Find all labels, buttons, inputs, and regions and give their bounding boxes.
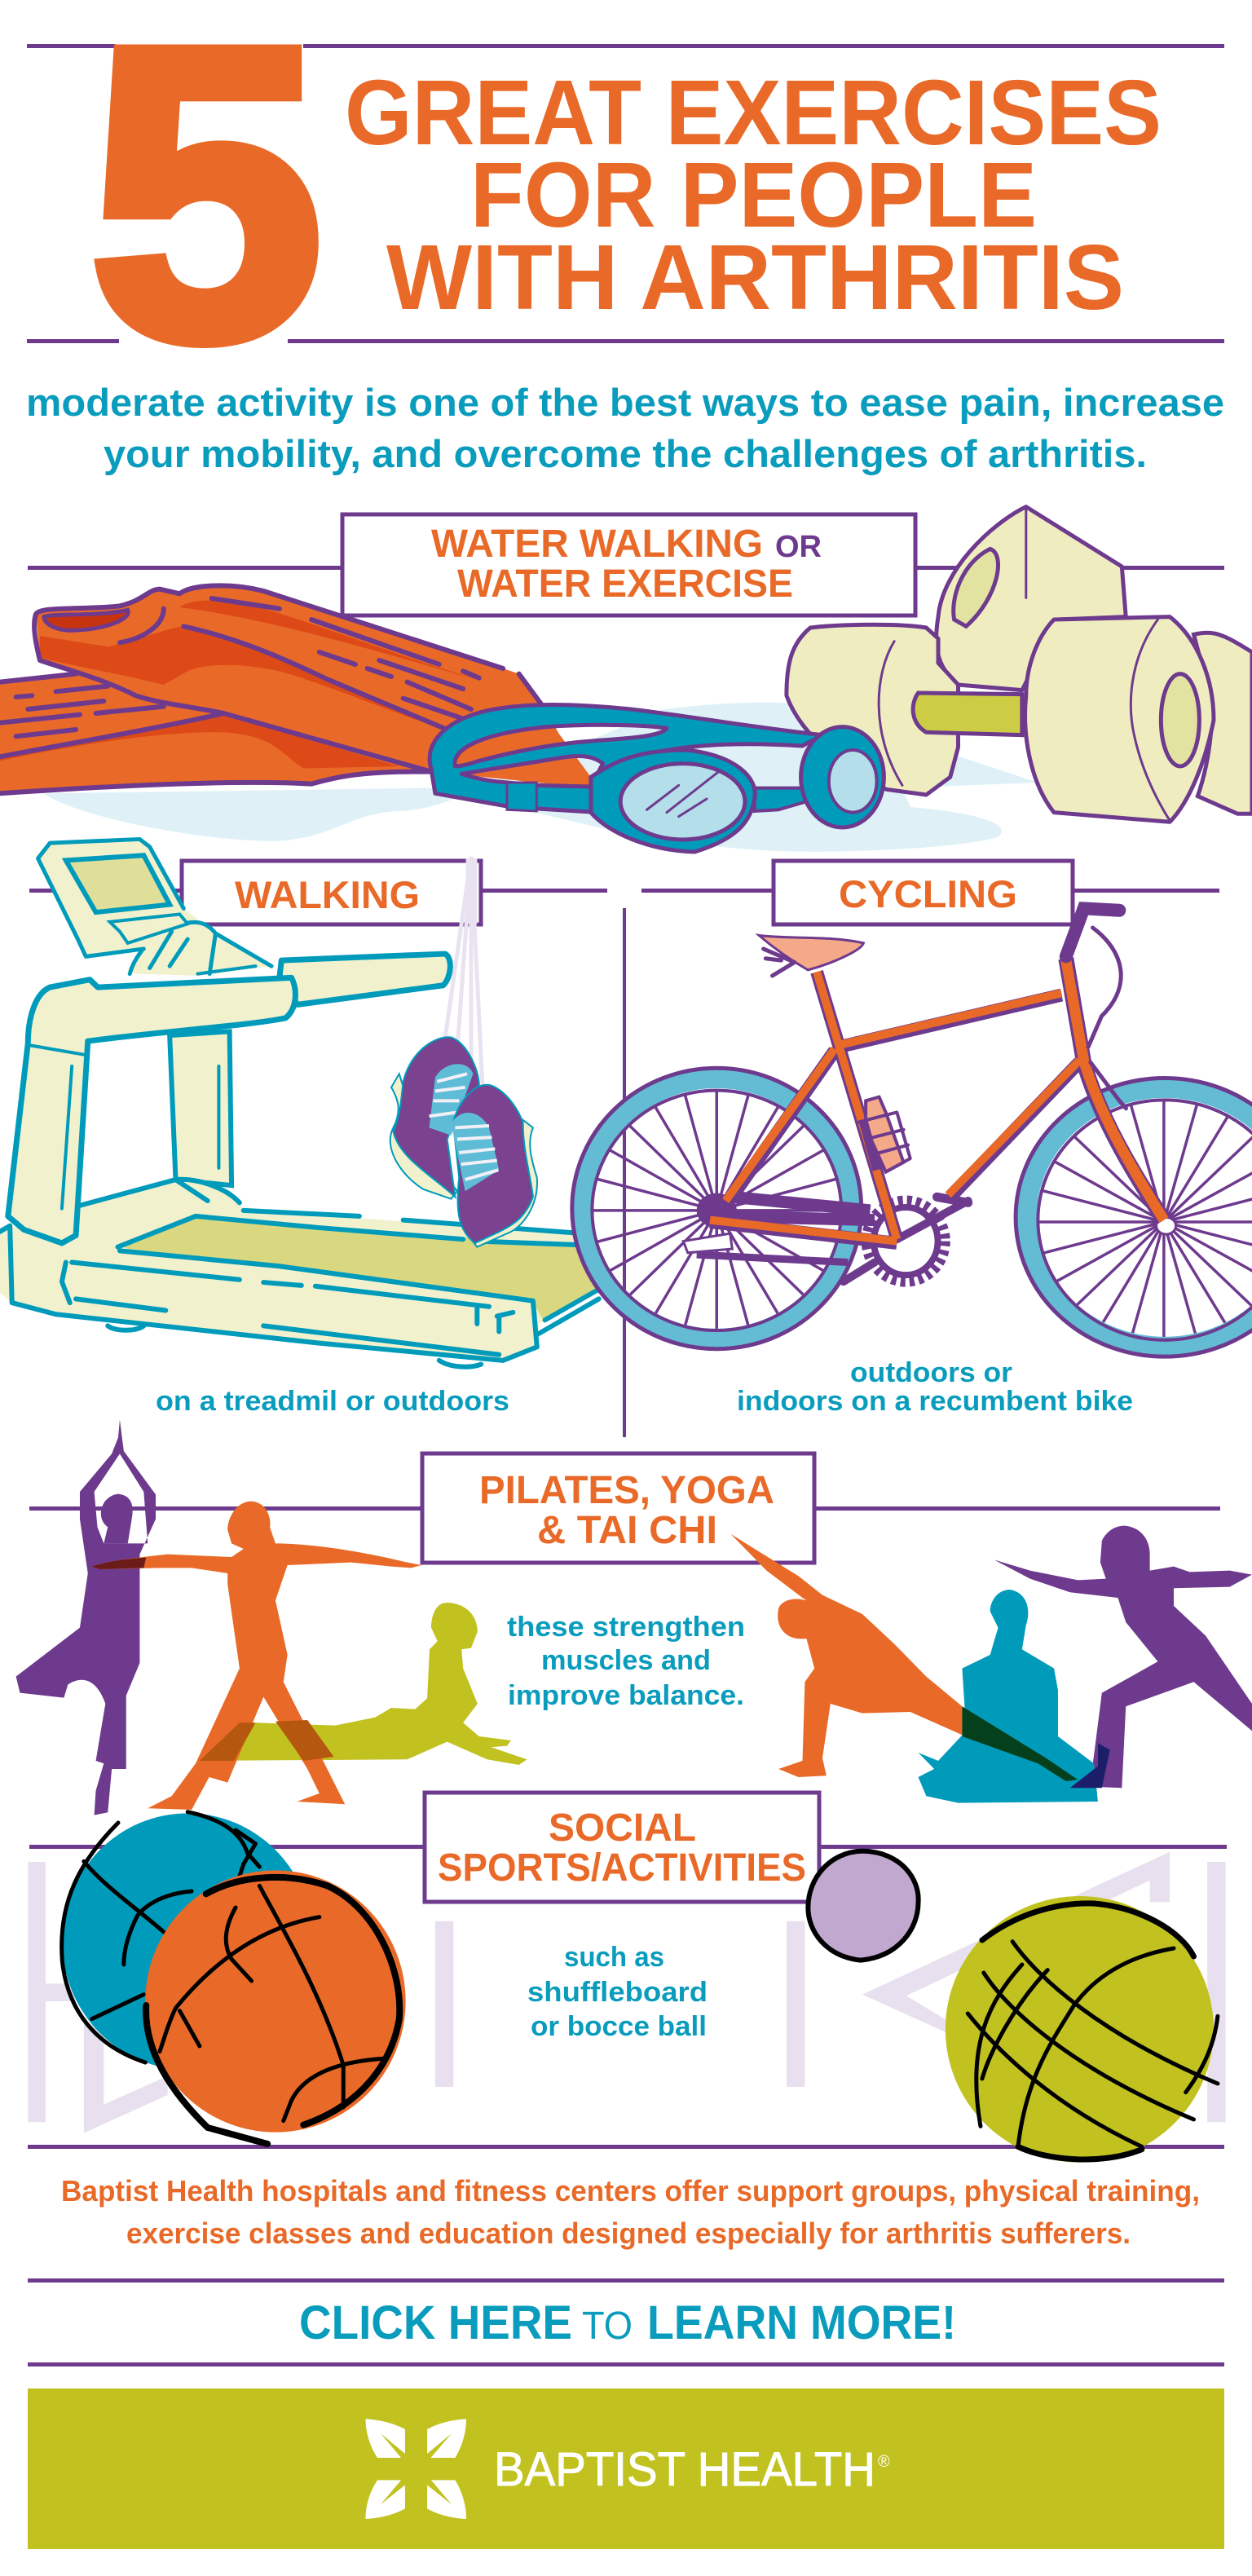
intro text: your mobility, and overcome the challenges of arthritis. [104, 432, 1147, 475]
yoga caption: muscles and [541, 1645, 711, 1676]
swim goggles [430, 705, 884, 852]
closing statement: Baptist Health hospitals and fitness centers offer support groups, physical training, [61, 2174, 1200, 2208]
icon: baptist health leaves [365, 2419, 466, 2519]
yoga caption [507, 1612, 745, 1711]
treadmill base [0, 1180, 599, 1367]
heading box: social sports: SPORTS/ACTIVITIES [438, 1846, 806, 1890]
call to action: LEARN MORE! [647, 2296, 956, 2349]
sports caption: shuffleboard [527, 1977, 708, 2008]
heading box: pilates [422, 1453, 814, 1563]
bike saddle [759, 935, 863, 976]
swim fin: front [34, 585, 591, 788]
footer bar [28, 2389, 1224, 2549]
sports caption [527, 1942, 708, 2042]
call to action [299, 2296, 956, 2349]
treadmill main frame [8, 966, 295, 1243]
left shoe [390, 1037, 479, 1199]
heading box: walking [182, 861, 481, 924]
water bottle [859, 1097, 910, 1172]
heading box: water walking: WATER EXERCISE [457, 562, 793, 606]
background court markings [28, 1852, 1226, 2133]
teal ball [62, 1812, 313, 2070]
orange ball [145, 1870, 406, 2144]
heading box: walking: WALKING [235, 873, 420, 916]
yoga caption: improve balance. [508, 1680, 744, 1711]
call to action: TO [582, 2305, 633, 2348]
treadmill far handle [280, 954, 450, 1004]
heading box: water walking: WATER WALKING [431, 523, 763, 566]
heading box: social sports: SOCIAL [549, 1806, 696, 1850]
sports caption: such as [564, 1942, 664, 1973]
heading box: cycling [774, 861, 1073, 924]
intro text: moderate activity is one of the best ways to ease pain, increase [26, 381, 1224, 424]
cycling caption [737, 1357, 1133, 1417]
heading box: pilates: PILATES, YOGA [479, 1469, 774, 1512]
handlebar and brake cable [1066, 908, 1126, 1109]
cycling caption: indoors on a recumbent bike [737, 1386, 1133, 1417]
heading box: water walking [342, 514, 915, 615]
intro text [26, 381, 1224, 475]
right shoe [451, 1085, 537, 1247]
figure: purple warrior pose right [994, 1526, 1252, 1788]
heading box: pilates: & TAI CHI [537, 1509, 717, 1552]
illustration: hanging shoes [390, 857, 537, 1247]
figure: teal seated pose [919, 1590, 1098, 1803]
lavender ball [806, 1851, 919, 1961]
closing statement [61, 2174, 1200, 2250]
rear wheel [572, 1068, 862, 1349]
title: GREAT EXERCISES [345, 61, 1162, 164]
closing statement: exercise classes and education designed especially for arthritis sufferers. [126, 2217, 1131, 2250]
illustration: bicycle [572, 908, 1252, 1356]
yoga caption: these strengthen [507, 1612, 745, 1643]
front wheel [1016, 1078, 1252, 1356]
water splash [44, 703, 1038, 852]
cycling caption: outdoors or [850, 1357, 1012, 1388]
swim fin: back [0, 674, 431, 793]
figure: orange side angle pose [730, 1534, 1110, 1788]
bike frame [710, 959, 1164, 1243]
logo wordmark: BAPTIST HEALTH [494, 2443, 875, 2496]
yoga silhouettes [16, 1420, 1252, 1815]
illustration: swim gear [0, 507, 1252, 852]
title: WITH ARTHRITIS [386, 226, 1124, 329]
sports caption: or bocce ball [531, 2011, 707, 2042]
chainring and drivetrain [683, 1197, 968, 1281]
figure: tree pose [16, 1420, 156, 1815]
figure: orange warrior pose [92, 1502, 421, 1810]
figure: olive cobra pose [200, 1603, 527, 1765]
illustration: treadmill [0, 839, 599, 1367]
sports balls [62, 1812, 1218, 2163]
heading box: cycling: CYCLING [839, 872, 1017, 915]
heading box: water walking: OR [775, 530, 822, 564]
call to action: CLICK HERE [299, 2296, 572, 2349]
title: FOR PEOPLE [470, 143, 1037, 246]
shoe laces [441, 857, 484, 1114]
olive ball [946, 1896, 1218, 2163]
treadmill console [38, 839, 271, 976]
heading box: social sports [425, 1793, 819, 1902]
dumbbell float [787, 507, 1252, 822]
walking caption: on a treadmil or outdoors [156, 1386, 509, 1417]
title [345, 61, 1162, 329]
registered mark: ® [878, 2453, 890, 2471]
treadmill second upright [170, 1031, 231, 1185]
